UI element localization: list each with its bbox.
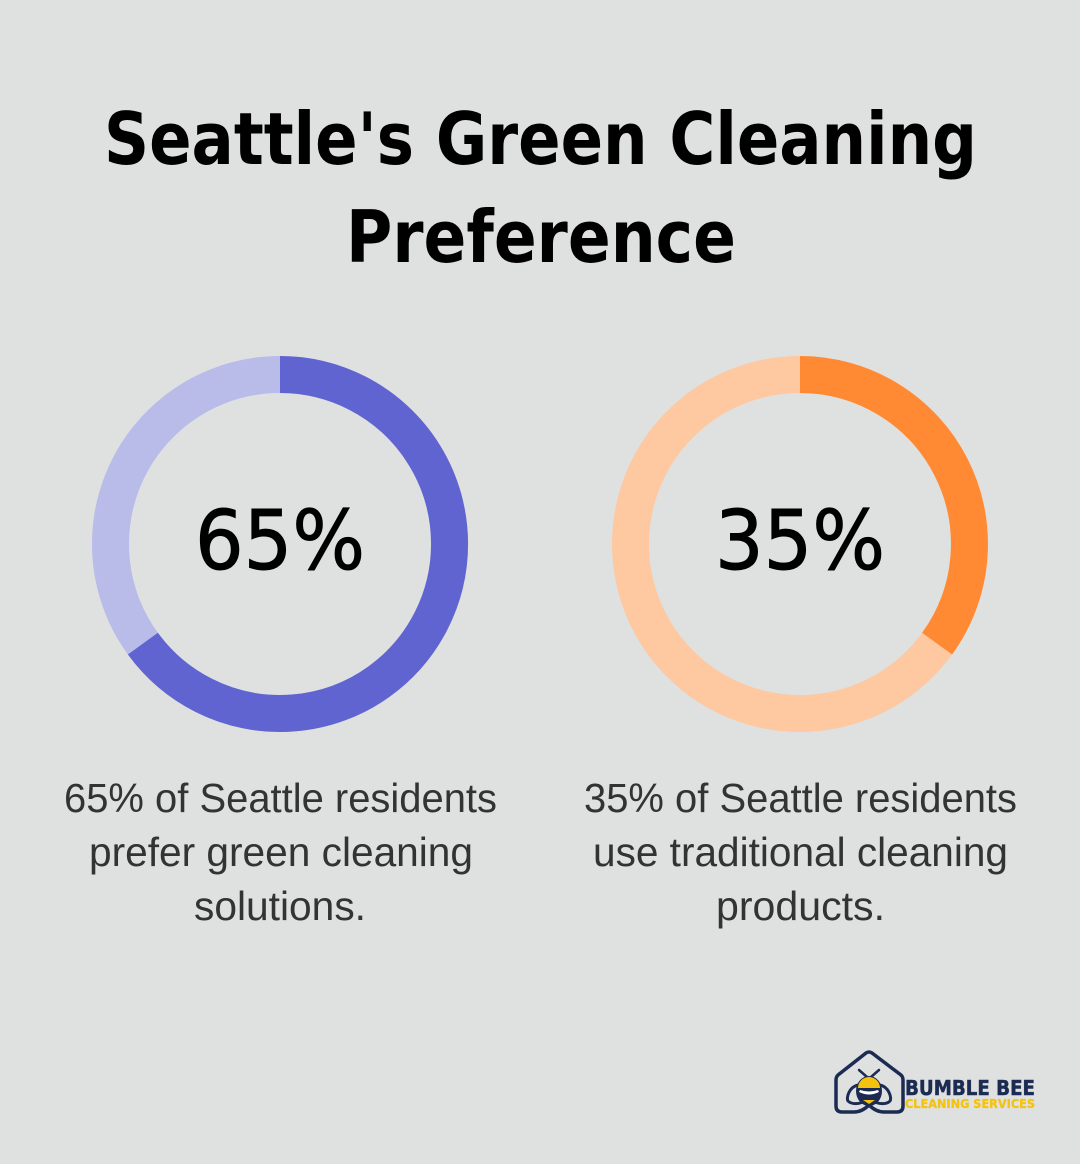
panel: traditional products 35% <box>584 374 1017 929</box>
description: green cleaning: solutions. <box>194 883 366 929</box>
description: traditional products: products. <box>716 883 885 929</box>
logo tagline: CLEANING SERVICES <box>905 1097 1035 1111</box>
donut chart: 65% <box>110 374 450 714</box>
description: traditional products: use traditional cleaning <box>593 829 1008 875</box>
description: traditional products <box>584 775 1017 929</box>
icon: house with bee <box>836 1052 903 1112</box>
description: green cleaning: 65% of Seattle residents <box>64 775 497 821</box>
description: traditional products: 35% of Seattle residents <box>584 775 1017 821</box>
donut chart: 35% <box>630 374 970 714</box>
title: Seattle's Green Cleaning <box>104 97 977 181</box>
logo: Bumble Bee Cleaning Services <box>836 1052 1035 1112</box>
description: green cleaning: prefer green cleaning <box>89 829 473 875</box>
stat: 35%: 35% <box>715 494 885 589</box>
title: Preference <box>346 195 736 279</box>
title <box>104 97 977 279</box>
description: green cleaning <box>64 775 497 929</box>
logo wordmark: BUMBLE BEE <box>905 1076 1035 1100</box>
panel: green cleaning 65% <box>64 374 497 929</box>
stat: 65%: 65% <box>195 494 365 589</box>
